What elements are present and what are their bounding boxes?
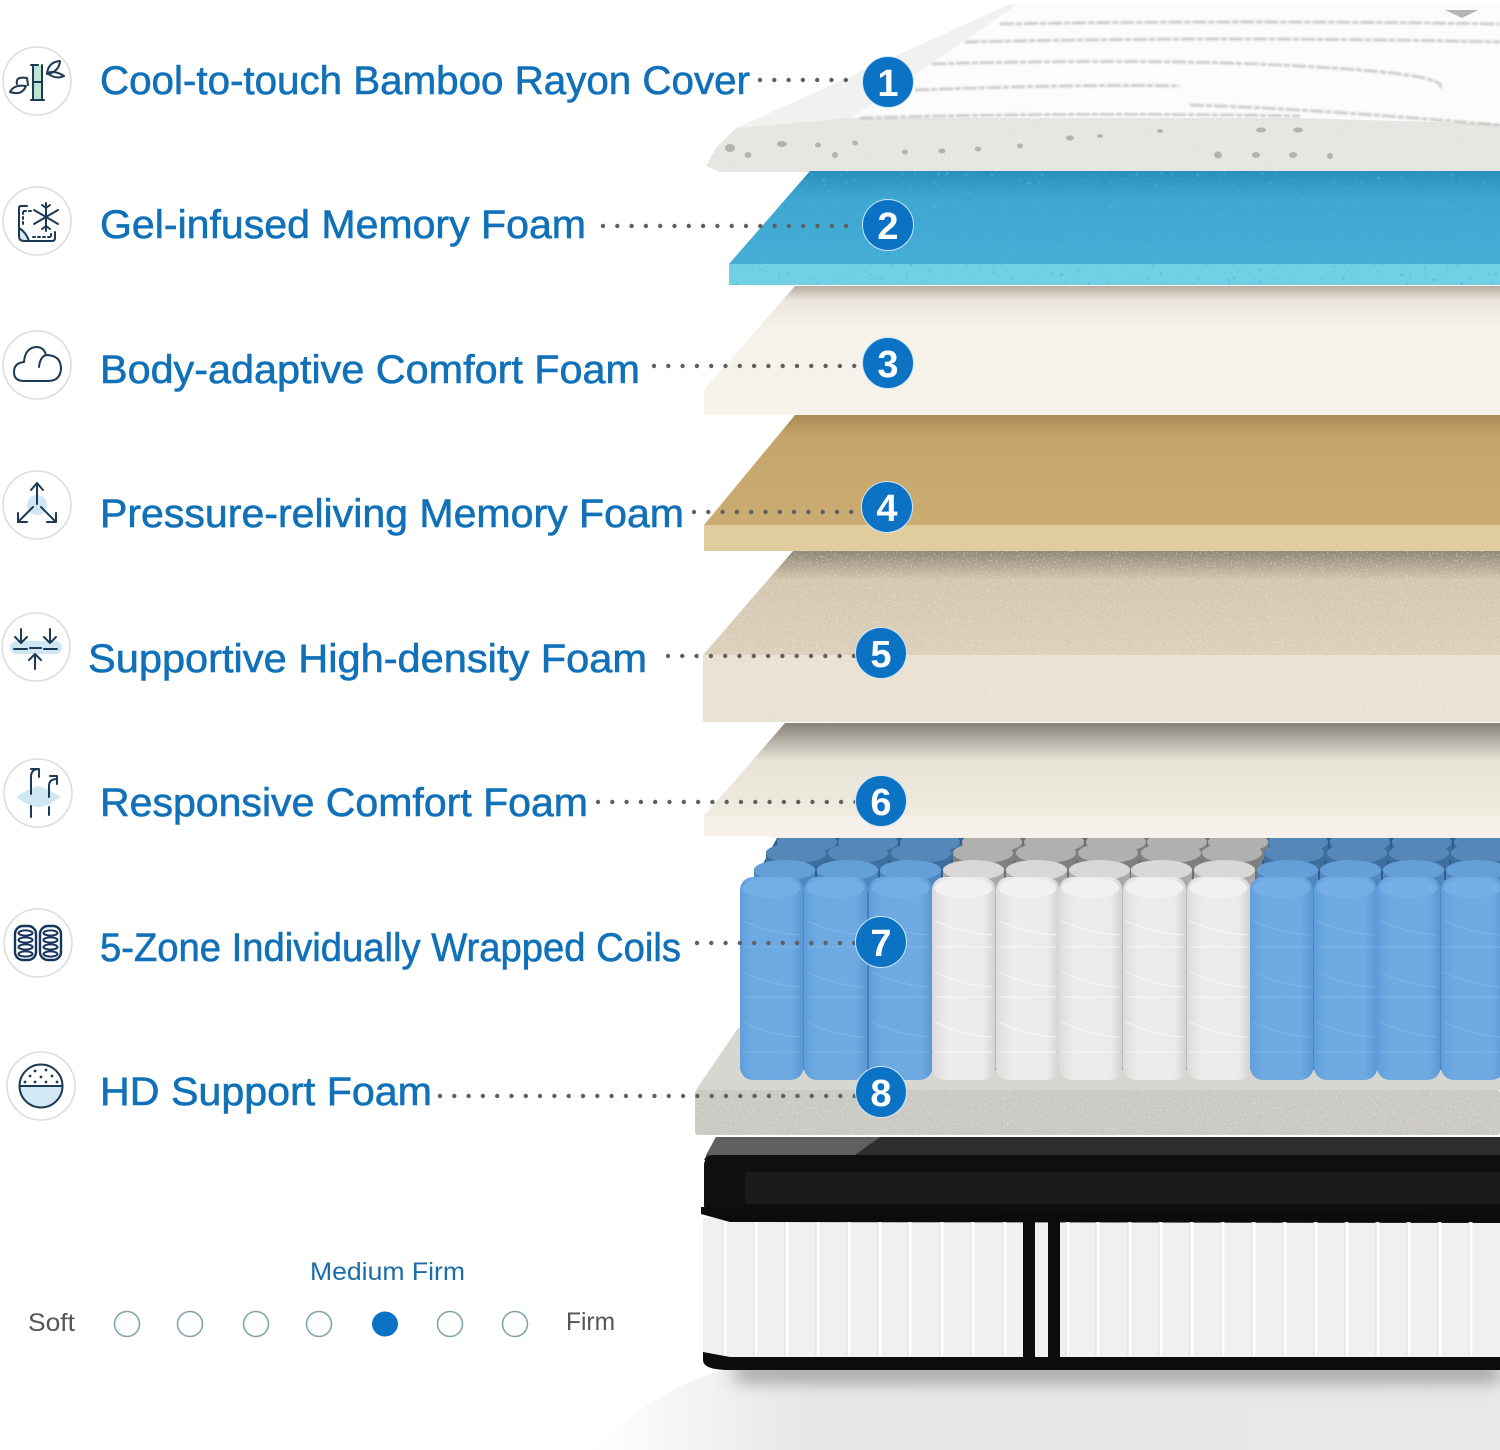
number badge 3 (862, 338, 914, 388)
firmness label: soft: Soft (28, 1309, 75, 1337)
icon: cloud (3, 331, 71, 399)
number badge 1: 1 (877, 63, 899, 105)
number badge 2: 2 (877, 206, 899, 248)
number badge 6 (856, 776, 906, 826)
icon: pressure arrows (3, 471, 71, 539)
firmness scale (28, 1258, 615, 1337)
layer 6: responsive comfort foam (704, 723, 1500, 836)
number badge 8 (856, 1066, 906, 1118)
icon: bamboo (3, 47, 71, 115)
icon: coils (4, 909, 72, 977)
firmness options (114, 1312, 528, 1336)
number badge 5 (856, 628, 906, 678)
layer 2: gel-infused foam (729, 171, 1500, 285)
icon: responsive arrows (4, 759, 72, 827)
heading: layer 5: Supportive High-density Foam (88, 637, 647, 681)
heading: layer 4: Pressure-reliving Memory Foam (100, 492, 684, 536)
number badge 6: 6 (870, 782, 892, 824)
layer 8: HD support foam (695, 1028, 1500, 1135)
heading: layer 1: Cool-to-touch Bamboo Rayon Cover (100, 59, 750, 103)
number badge 7 (856, 916, 906, 968)
number badge 2 (862, 200, 914, 250)
heading: layer 8: HD Support Foam (100, 1070, 432, 1114)
number badge 1 (862, 56, 914, 108)
number badge 8: 8 (870, 1073, 892, 1115)
number badge 4 (862, 482, 912, 532)
firmness label: medium firm: Medium Firm (310, 1258, 465, 1286)
firmness label: firm: Firm (566, 1308, 615, 1336)
leader line dots (440, 80, 866, 1096)
number badge 7: 7 (870, 923, 892, 965)
icon: gel snowflake (3, 187, 71, 255)
layer 7: pocket coils (740, 826, 1500, 1080)
number badge 4: 4 (876, 488, 898, 530)
heading: layer 2: Gel-infused Memory Foam (100, 203, 586, 247)
floor shadow (590, 1368, 1500, 1450)
layer 5: high-density foam (703, 551, 1500, 722)
layer 1: bamboo rayon cover (706, 4, 1500, 172)
heading: layer 3: Body-adaptive Comfort Foam (100, 348, 640, 392)
icon: high density arrows (2, 613, 70, 681)
layer 4: memory foam (704, 415, 1500, 551)
number badge 5: 5 (870, 634, 892, 676)
heading: layer 6: Responsive Comfort Foam (100, 781, 588, 825)
heading: layer 7: 5-Zone Individually Wrapped Coils (100, 926, 681, 970)
number badge 3: 3 (877, 344, 899, 386)
layer 3: comfort foam (704, 286, 1500, 415)
assembled mattress (701, 1137, 1500, 1380)
icon: foam cross-section (7, 1052, 75, 1120)
